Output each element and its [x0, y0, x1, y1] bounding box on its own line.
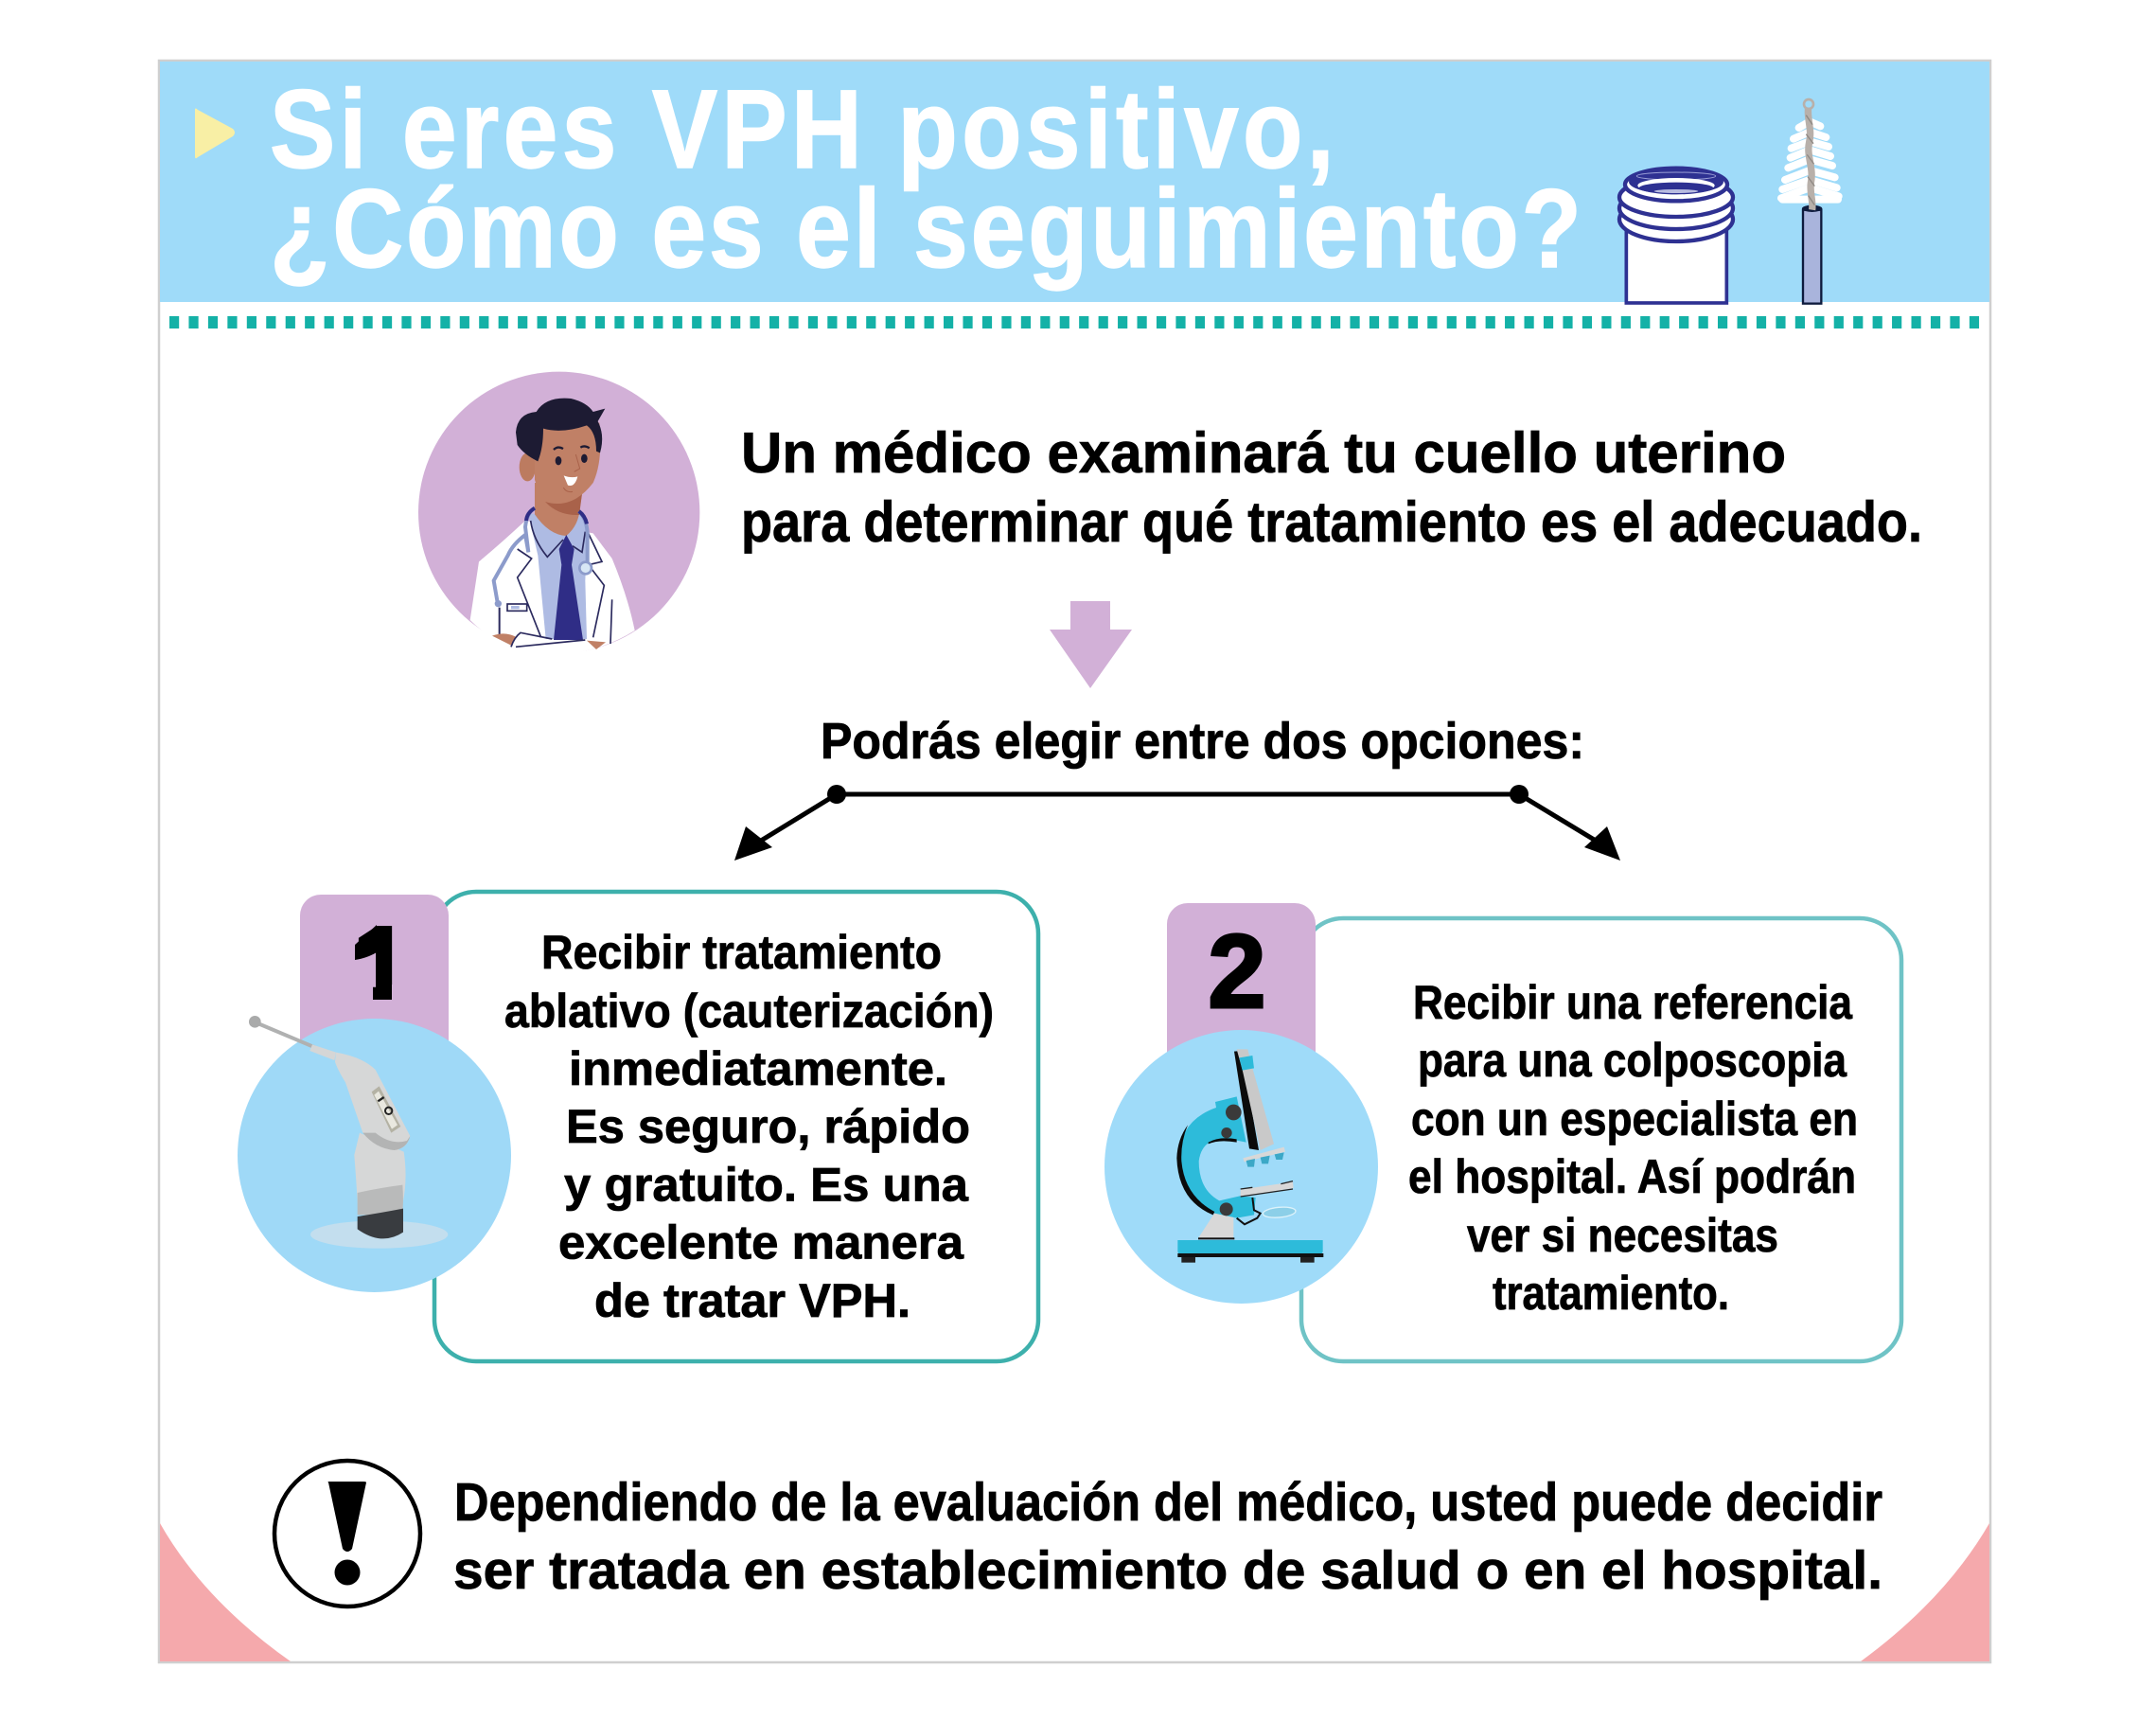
text: closing note: Dependiendo de la evaluación del médico, usted puede decidir: [454, 1472, 1882, 1533]
option 1 text: inmediatamente.: [569, 1042, 947, 1095]
option 2 circle: [1105, 1030, 1378, 1304]
title: Si eres VPH positivo,: [270, 66, 1334, 191]
text: options intro: Podrás elegir entre dos opciones:: [821, 713, 1584, 770]
heading: doctor statement: [741, 421, 1922, 554]
doctor tie: [554, 535, 583, 640]
icon: cervical brush: [1781, 99, 1839, 304]
text: closing note: [453, 1472, 1882, 1601]
option 2 text: tratamiento.: [1493, 1267, 1729, 1320]
option 1 text: de tratar VPH.: [594, 1274, 910, 1327]
arrow: down: [1050, 601, 1132, 688]
option 1 number: 1: [352, 905, 411, 1021]
divider: teal dotted line: [169, 316, 1980, 328]
doctor crossed arms: [492, 633, 606, 649]
doctor face: [516, 399, 605, 504]
panel: option 2: [1105, 903, 1901, 1361]
title: [270, 66, 1582, 291]
option 2 text box: [1301, 918, 1901, 1361]
stethoscope: [494, 508, 588, 604]
option 2 text: ver si necesitas: [1467, 1209, 1778, 1262]
option 1 text: Recibir tratamiento: [541, 926, 942, 979]
option 2 text: [1408, 976, 1858, 1320]
icon: warning exclamation: [274, 1461, 420, 1607]
option 1 text: Es seguro, rápido: [566, 1100, 970, 1153]
text: closing note: ser tratada en establecimiento de salud o en el hospital.: [453, 1540, 1882, 1601]
option 1 number tab: [300, 895, 449, 1074]
option 2 number tab: [1167, 903, 1316, 1083]
panel: frame: [159, 61, 1990, 1662]
option 1 text: [504, 926, 994, 1327]
option 2 number: 2: [1208, 914, 1266, 1030]
option 2 text: el hospital. Así podrán: [1408, 1150, 1856, 1203]
option 1 text box: [434, 892, 1038, 1361]
corner: bottom left pink: [160, 1523, 291, 1661]
banner: [160, 62, 1989, 304]
option 2 text: con un especialista en: [1411, 1092, 1858, 1145]
icon: title triangle: [195, 108, 235, 158]
doctor shirt: [528, 508, 588, 639]
doctor collar and lapels: [518, 521, 612, 644]
arrows: branch to options: [734, 785, 1620, 861]
heading: doctor statement: para determinar qué tratamiento es el adecuado.: [741, 490, 1922, 554]
option 1 text: excelente manera: [558, 1216, 964, 1269]
title: ¿Cómo es el seguimiento?: [270, 166, 1582, 291]
icon: microscope: [1176, 1049, 1323, 1263]
panel: option 1: [238, 892, 1038, 1361]
option 1 text: y gratuito. Es una: [564, 1159, 969, 1212]
icon: doctor: [418, 372, 699, 655]
heading: doctor statement: Un médico examinará tu cuello uterino: [741, 421, 1786, 485]
option 1 text: ablativo (cauterización): [504, 985, 994, 1038]
corner: bottom right pink: [1861, 1523, 1989, 1661]
doctor coat: [470, 521, 635, 655]
doctor neck: [535, 483, 584, 536]
icon: sample jar: [1619, 169, 1733, 303]
option 2 text: para una colposcopia: [1418, 1034, 1847, 1087]
option 1 circle: [238, 1019, 511, 1292]
option 2 text: Recibir una referencia: [1413, 976, 1853, 1029]
icon: thermal ablation device: [249, 1016, 448, 1249]
